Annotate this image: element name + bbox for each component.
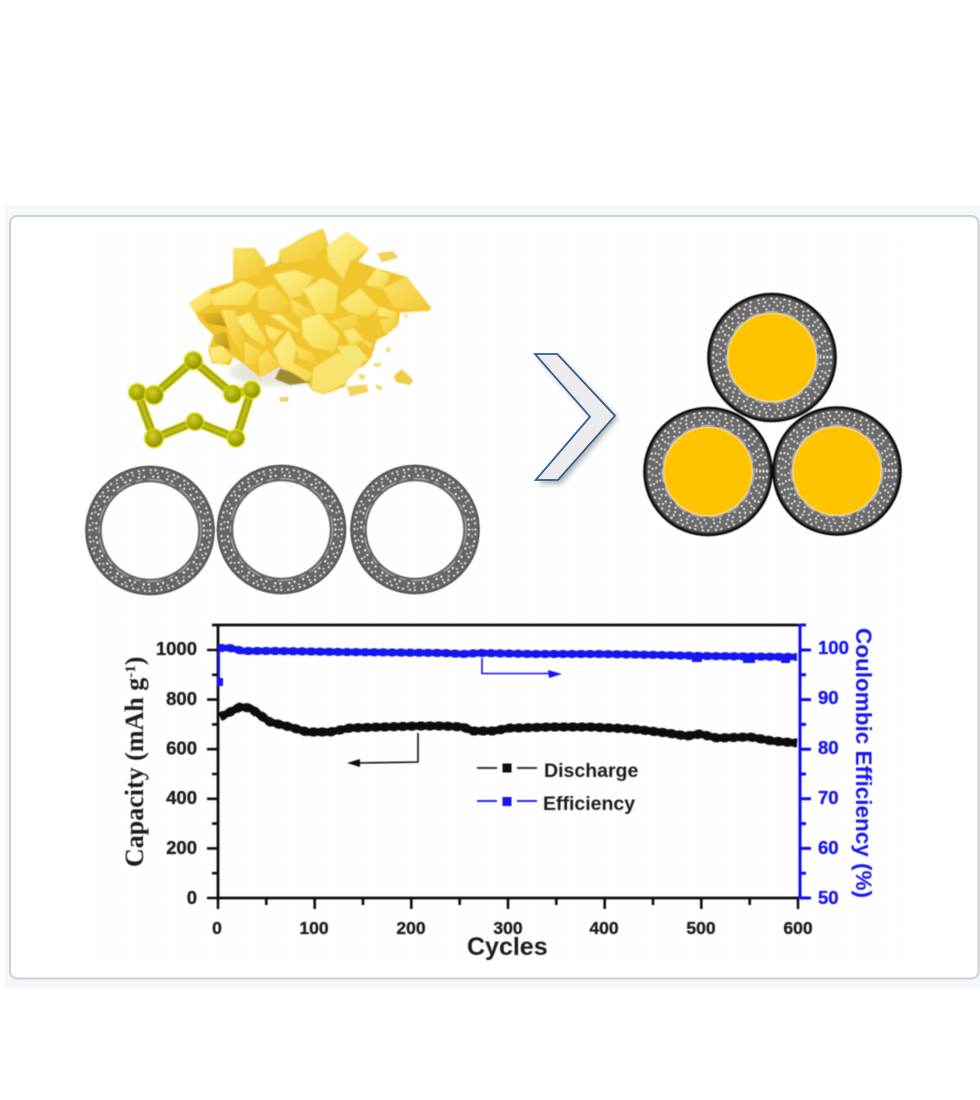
left y axis title: -1 [123, 665, 139, 678]
left axis tick labels: 0 [187, 887, 197, 908]
right axis tick labels: 90 [818, 687, 839, 708]
left axis tick labels: 200 [166, 837, 197, 858]
discharge capacity series [220, 707, 797, 743]
bottom axis tick labels: 500 [686, 918, 716, 938]
right axis tick labels [818, 637, 849, 908]
bottom axis tick labels [212, 918, 813, 938]
right efficiency axis [800, 624, 811, 899]
left axis tick labels [156, 638, 197, 908]
right axis tick labels: 70 [818, 787, 839, 808]
left axis tick labels: 1000 [156, 638, 197, 659]
plot frame [212, 625, 799, 898]
legend: discharge: Discharge [544, 760, 638, 782]
right axis tick labels: 60 [818, 837, 839, 858]
faint dotted image background [90, 235, 900, 960]
efficiency series [217, 646, 797, 686]
left axis tick labels: 800 [166, 688, 197, 709]
arrow: chevron to filled spheres [535, 354, 618, 484]
bottom axis tick labels: 600 [783, 918, 813, 938]
right axis tick labels: 80 [818, 737, 839, 758]
left axis tick labels: 600 [166, 738, 197, 758]
legend: efficiency: Efficiency [543, 793, 635, 815]
right axis tick labels: 50 [818, 887, 839, 908]
bottom axis tick labels: 0 [212, 918, 222, 938]
right y axis title: Coulombic Efficiency (%) [851, 628, 876, 898]
left axis tick labels: 400 [166, 787, 197, 808]
bottom axis tick labels: 200 [396, 918, 426, 938]
photo: sulfur chunks [188, 228, 432, 402]
legend: discharge [477, 760, 638, 782]
legend: efficiency [477, 793, 635, 815]
bottom axis tick labels: 400 [589, 918, 619, 938]
arrow: efficiency series points to right axis [482, 658, 562, 678]
chart: capacity and coulombic efficiency versus cycles [120, 624, 876, 961]
icon: S8 sulfur ring molecule [129, 352, 260, 448]
white card panel [10, 216, 978, 978]
arrow: discharge series points to left axis [347, 733, 418, 767]
right axis tick labels: 100 [818, 637, 849, 658]
left and bottom axis ticks [207, 650, 798, 909]
left y axis title: ) [120, 657, 149, 665]
outer pale blue frame [5, 206, 980, 988]
x axis title: Cycles [467, 933, 548, 961]
left y axis title: Capacity (mAh g [120, 678, 149, 867]
bottom axis tick labels: 300 [493, 918, 523, 938]
bottom axis tick labels: 100 [299, 918, 329, 938]
sulfur-filled carbon spheres [644, 294, 900, 535]
empty hollow carbon spheres [86, 466, 479, 594]
